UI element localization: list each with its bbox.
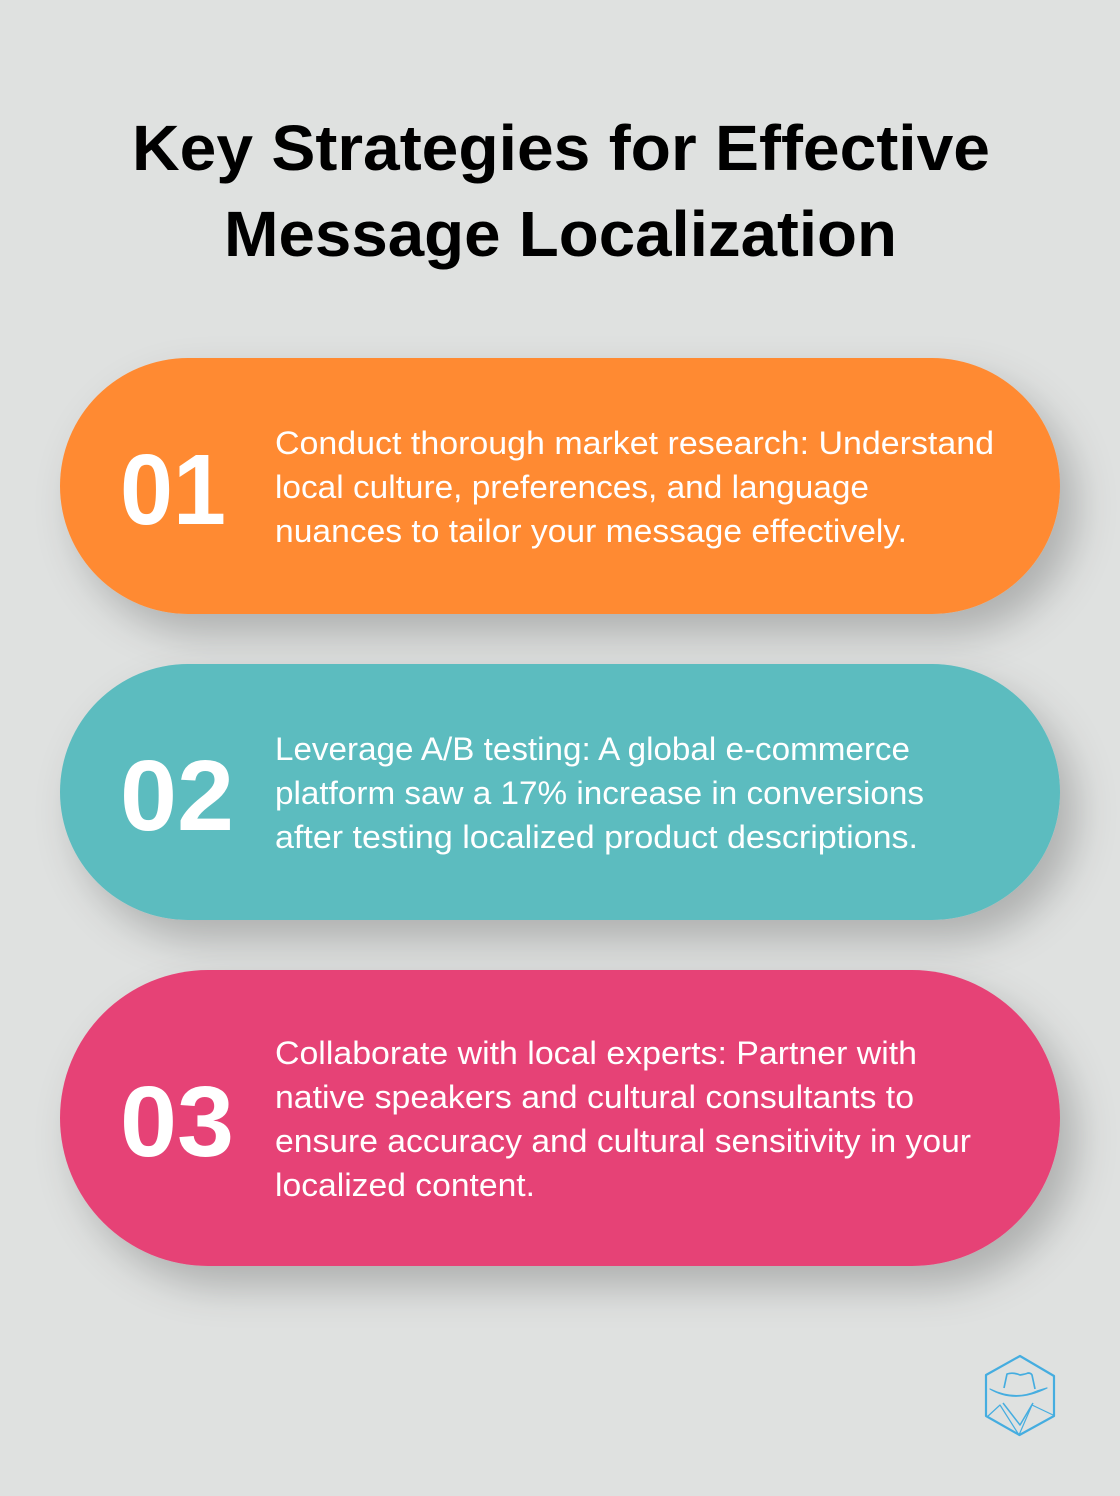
number 03: 03 [120,1066,234,1178]
panel: strategy 02 [60,664,1060,920]
panel: strategy 03 [60,970,1060,1266]
text: A/B testing: Leverage A/B testing: A global e-commerce [275,731,910,767]
title [132,112,990,270]
pill background: teal [60,664,1060,920]
pill background: orange [60,358,1060,614]
text: market research: Conduct thorough market research: Understand [275,425,994,461]
title: Key Strategies for Effective [132,112,990,184]
text: A/B testing: after testing localized product descriptions. [275,819,918,855]
text: local experts: localized content. [275,1167,535,1203]
number 01: 01 [120,434,226,546]
text: local experts: Collaborate with local experts: Partner with [275,1035,917,1071]
pill background: pink [60,970,1060,1266]
text: A/B testing [275,731,924,855]
text: local experts: ensure accuracy and cultural sensitivity in your [275,1123,971,1159]
text: local experts: native speakers and cultural consultants to [275,1079,914,1115]
text: market research: nuances to tailor your message effectively. [275,513,907,549]
text: local experts [275,1035,971,1203]
text: A/B testing: platform saw a 17% increase in conversions [275,775,924,811]
number 02: 02 [120,740,234,852]
icon: hexagon spy logo [986,1356,1054,1435]
panel: strategy 01 [60,358,1060,614]
title: Message Localization [224,198,897,270]
text: market research: local culture, preferences, and language [275,469,869,505]
text: market research [275,425,994,549]
